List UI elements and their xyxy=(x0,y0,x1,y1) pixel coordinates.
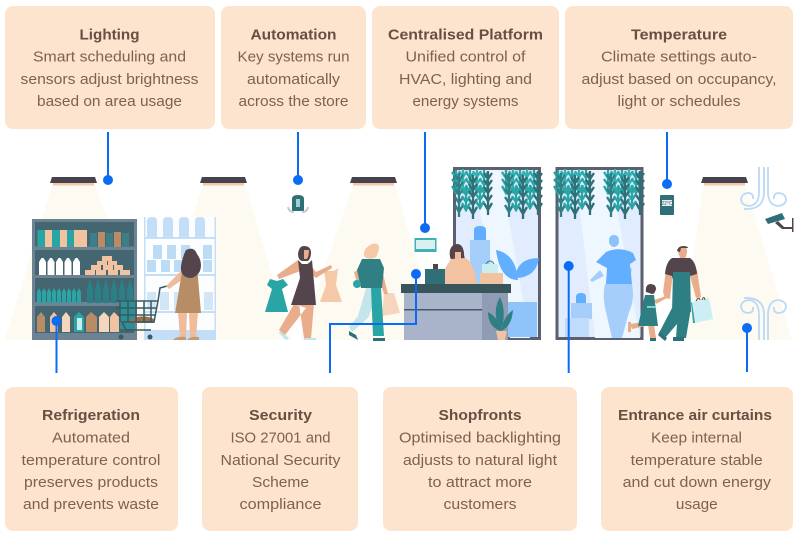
scene: store illustration xyxy=(5,167,794,341)
body text: Scheme xyxy=(252,474,309,491)
body text: to attract more xyxy=(428,474,532,491)
panel: security xyxy=(202,387,358,531)
panel: lighting xyxy=(5,6,215,129)
connector: temperature xyxy=(662,132,672,189)
body text: HVAC, lighting and xyxy=(399,71,532,88)
body text xyxy=(238,49,350,110)
body text: energy systems xyxy=(412,93,518,110)
light leg xyxy=(349,288,380,332)
shopper with bag xyxy=(349,244,400,341)
body text: sensors adjust brightness xyxy=(20,71,198,88)
body text: Unified control of xyxy=(406,49,526,66)
hair xyxy=(181,249,201,278)
hair xyxy=(364,244,379,259)
body text xyxy=(220,430,341,513)
father and daughter xyxy=(628,246,713,341)
thermostat xyxy=(660,195,674,215)
connector: lighting xyxy=(103,132,113,185)
father arms xyxy=(663,270,701,299)
shelf 4 products xyxy=(37,312,119,332)
body text: Climate settings auto- xyxy=(601,49,757,66)
shopfront window 1 xyxy=(452,168,542,338)
light cone 3 xyxy=(300,185,440,340)
automation device xyxy=(288,195,308,212)
cash register monitor xyxy=(425,264,445,286)
air curtain bottom xyxy=(741,298,786,340)
body text: based on area usage xyxy=(37,93,182,110)
thermostat: 22°C xyxy=(661,201,673,207)
connector: centralised platform xyxy=(420,132,430,233)
body text xyxy=(399,49,532,110)
checkout counter xyxy=(401,244,513,340)
mannequin xyxy=(590,235,636,338)
body text: Key systems run xyxy=(238,49,350,66)
panel: refrigeration xyxy=(5,387,178,531)
dress xyxy=(175,266,201,313)
connector: refrigeration xyxy=(52,316,62,373)
connector: security xyxy=(330,269,421,373)
connector: shopfronts xyxy=(564,261,574,373)
body text xyxy=(582,49,776,110)
shelf 2 products xyxy=(39,256,130,275)
window bags xyxy=(565,293,592,337)
light cone 1 xyxy=(5,185,152,340)
body text: light or schedules xyxy=(618,93,740,110)
body text xyxy=(399,430,561,513)
panel: shopfronts xyxy=(383,387,577,531)
shopper holding dresses xyxy=(265,246,342,340)
father overalls xyxy=(672,272,691,312)
teal leg xyxy=(371,288,384,336)
panel: entrance air curtains xyxy=(601,387,793,531)
heading: Lighting xyxy=(80,26,140,44)
shelf 1 products xyxy=(38,230,129,247)
shopfront window 2 xyxy=(554,168,644,338)
shopping bag xyxy=(692,298,713,323)
body text: Smart scheduling and xyxy=(33,49,186,66)
body text: usage xyxy=(676,496,718,513)
body text: across the store xyxy=(238,93,348,110)
body text xyxy=(20,49,198,110)
heading: Temperature xyxy=(631,26,727,44)
heading: Entrance air curtains xyxy=(618,407,772,424)
refrigerated shelf xyxy=(32,219,137,340)
vines xyxy=(502,169,542,219)
teal dress xyxy=(265,279,288,312)
connector: automation xyxy=(293,132,303,185)
body text: temperature stable xyxy=(631,452,763,469)
body text: ISO 27001 and xyxy=(230,430,330,447)
ceiling lamps xyxy=(50,177,748,186)
white display shelf xyxy=(144,217,216,340)
body text: Optimised backlighting xyxy=(399,430,561,447)
body text: automatically xyxy=(247,71,341,88)
shelf 3 products xyxy=(37,280,133,303)
body text: Keep internal xyxy=(651,430,742,447)
wall tablet xyxy=(414,238,436,252)
shopping cart xyxy=(116,286,167,340)
body text: customers xyxy=(444,496,516,513)
body text: National Security xyxy=(220,452,341,469)
arms xyxy=(277,260,332,279)
body text: and prevents waste xyxy=(23,496,159,513)
father shirt xyxy=(665,258,697,283)
arm xyxy=(166,268,190,289)
body text: preserves products xyxy=(24,474,158,491)
heading: Automation xyxy=(250,26,336,44)
heading: Centralised Platform xyxy=(388,26,543,44)
body text: temperature control xyxy=(22,452,160,469)
legs xyxy=(178,312,198,337)
parcels xyxy=(480,261,503,284)
head and hair xyxy=(298,246,311,261)
vines xyxy=(604,169,644,219)
heading: Shopfronts xyxy=(438,407,522,424)
security camera xyxy=(765,213,794,232)
cashier xyxy=(441,244,477,284)
connector: air curtains xyxy=(742,323,752,372)
arm xyxy=(354,262,388,294)
heading: Security xyxy=(249,407,313,424)
girl xyxy=(628,284,667,341)
heading: Refrigeration xyxy=(42,407,140,424)
body text: Automated xyxy=(52,430,130,447)
body text: adjust based on occupancy, xyxy=(582,71,776,88)
panel: automation xyxy=(221,6,366,129)
air curtain top xyxy=(741,167,786,209)
peach dress xyxy=(320,268,342,302)
panel: temperature xyxy=(565,6,793,129)
teal top xyxy=(357,259,384,288)
shop display xyxy=(470,226,539,337)
bag xyxy=(382,293,400,316)
body text: compliance xyxy=(240,496,322,513)
dress xyxy=(291,260,316,305)
vines xyxy=(452,169,492,219)
father legs xyxy=(659,308,691,338)
panel: centralised platform xyxy=(372,6,559,129)
light cone 4 xyxy=(683,185,792,340)
legs xyxy=(279,304,314,338)
shopper with cart xyxy=(116,249,201,340)
body text: and cut down energy xyxy=(623,474,771,491)
body text xyxy=(623,430,771,513)
body text xyxy=(22,430,160,513)
body text: adjusts to natural light xyxy=(403,452,558,469)
light cone 2 xyxy=(150,185,292,340)
vines xyxy=(554,169,594,219)
plant xyxy=(488,297,513,340)
